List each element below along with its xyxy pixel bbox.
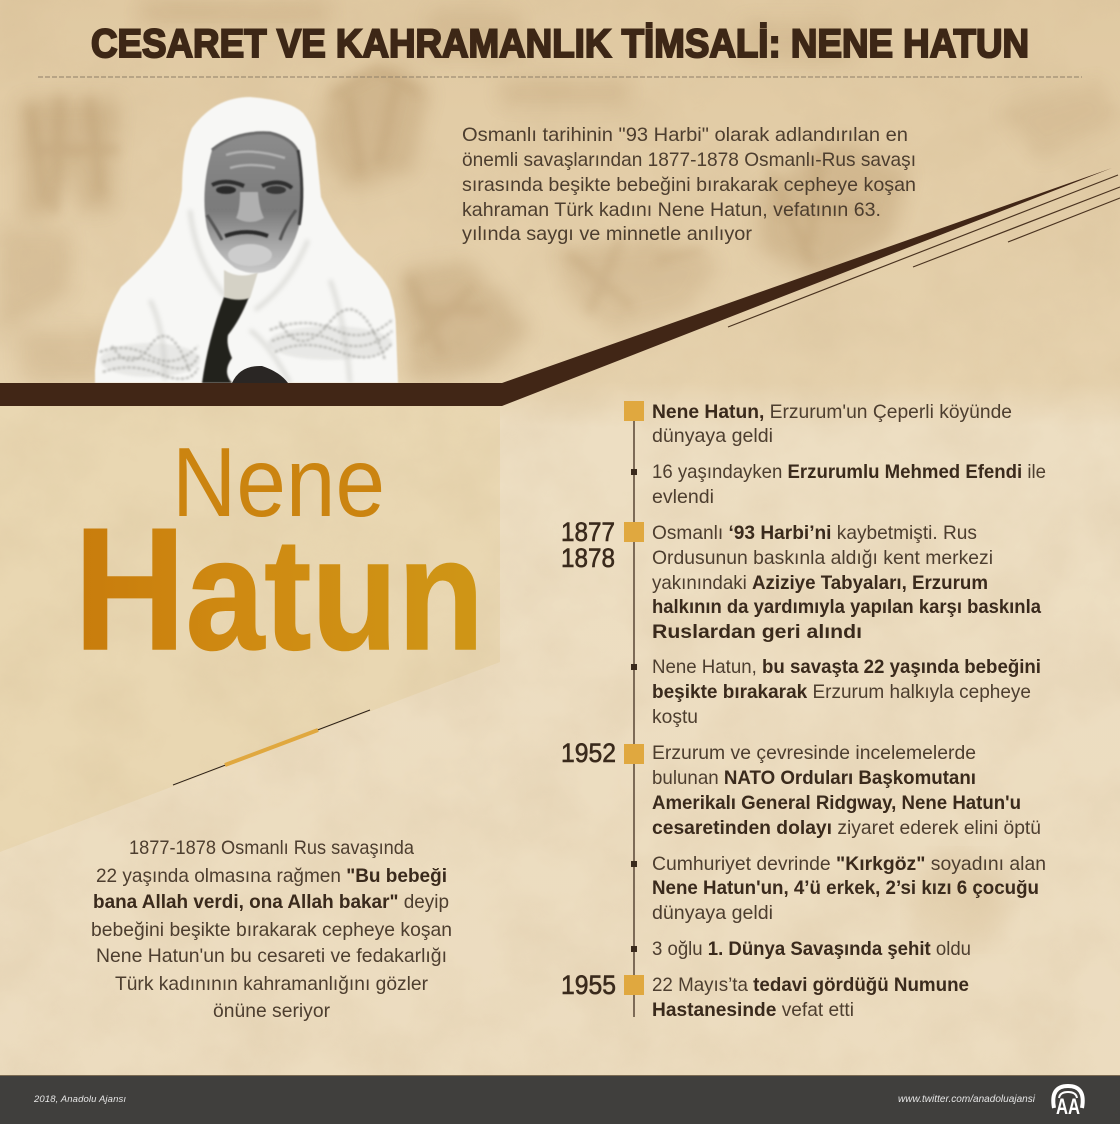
intro text: kahraman Türk kadını Nene Hatun, vefatının 63.	[462, 199, 881, 221]
dark brown divider band	[0, 168, 1112, 406]
intro text	[462, 124, 916, 245]
left story paragraph: Nene Hatun'un bu cesareti ve fedakarlığı	[96, 945, 447, 967]
name heading: Nene	[172, 427, 385, 537]
face features	[207, 133, 302, 266]
years	[561, 517, 616, 1000]
timeline text: Erzurum ve çevresinde incelemelerde	[652, 742, 976, 764]
credit: 2018, Anadolu Ajansı	[33, 1094, 126, 1105]
timeline text: yakınındaki Aziziye Tabyaları, Erzurum	[652, 572, 988, 594]
timeline text: evlendi	[652, 486, 714, 508]
timeline text: Nene Hatun'un, 4’ü erkek, 2’si kızı 6 çocuğu	[652, 877, 1039, 899]
left story paragraph: Türk kadınının kahramanlığını gözler	[115, 973, 428, 995]
left story paragraph: bana Allah verdi, ona Allah bakar" deyip	[93, 891, 449, 913]
timeline text: Amerikalı General Ridgway, Nene Hatun'u	[652, 792, 1021, 814]
years: 1877	[561, 517, 615, 547]
intro text: Osmanlı tarihinin "93 Harbi" olarak adlandırılan en	[462, 124, 908, 146]
timeline markers	[624, 401, 644, 995]
background battle sketch	[0, 0, 1120, 380]
name heading: Hatun	[74, 491, 484, 686]
left story paragraph: önüne seriyor	[213, 1000, 330, 1022]
footer bar	[0, 1075, 1120, 1124]
years: 1878	[561, 543, 615, 573]
embroidery	[100, 309, 392, 379]
thin accent lines	[728, 175, 1120, 327]
timeline text: Ordusunun baskınla aldığı kent merkezi	[652, 547, 993, 569]
timeline text: 3 oğlu 1. Dünya Savaşında şehit oldu	[652, 938, 971, 960]
left story paragraph: 1877-1878 Osmanlı Rus savaşında	[129, 837, 414, 859]
timeline text: Nene Hatun, bu savaşta 22 yaşında bebeğini	[652, 656, 1041, 678]
timeline text: 22 Mayıs’ta tedavi gördüğü Numune	[652, 974, 969, 996]
timeline text: dünyaya geldi	[652, 425, 773, 447]
portrait of Nene Hatun	[95, 97, 398, 383]
timeline text: halkının da yardımıyla yapılan karşı baskınla	[652, 596, 1041, 618]
timeline text: koştu	[652, 706, 698, 728]
timeline text: Ruslardan geri alındı	[652, 621, 862, 643]
intro text: yılında saygı ve minnetle anılıyor	[462, 223, 753, 245]
timeline	[561, 401, 1046, 1021]
years: 1955	[561, 970, 616, 1000]
left story paragraph	[91, 837, 452, 1022]
face	[204, 133, 302, 273]
intro text: sırasında beşikte bebeğini bırakarak cepheye koşan	[462, 174, 916, 196]
icon: Anadolu Agency logo: AA	[1056, 1094, 1080, 1119]
intro text: önemli savaşlarından 1877-1878 Osmanlı-Rus savaşı	[462, 149, 916, 171]
headscarf	[95, 97, 398, 383]
timeline text: beşikte bırakarak Erzurum halkıyla cepheye	[652, 681, 1031, 703]
dark dress	[202, 297, 249, 383]
left story paragraph: 22 yaşında olmasına rağmen "Bu bebeği	[96, 865, 447, 887]
timeline text: dünyaya geldi	[652, 902, 773, 924]
timeline text: Cumhuriyet devrinde "Kırkgöz" soyadını alan	[652, 853, 1046, 875]
timeline text: 16 yaşındayken Erzurumlu Mehmed Efendi ile	[652, 461, 1046, 483]
timeline text: bulunan NATO Orduları Başkomutanı	[652, 767, 976, 789]
timeline text: Osmanlı ‘93 Harbi’ni kaybetmişti. Rus	[652, 522, 977, 544]
dark shape at chest	[232, 366, 288, 383]
small ornament	[173, 710, 370, 785]
scarf shadow folds	[150, 210, 350, 383]
icon: Anadolu Agency logo	[1053, 1086, 1083, 1119]
left story paragraph: bebeğini beşikte bırakarak cepheye koşan	[91, 919, 452, 941]
timeline text: cesaretinden dolayı ziyaret ederek elini öptü	[652, 817, 1041, 839]
timeline text	[652, 401, 1046, 1021]
title: CESARET VE KAHRAMANLIK TİMSALİ: NENE HATUN	[91, 22, 1029, 66]
neck band	[224, 270, 258, 300]
timeline text: Nene Hatun, Erzurum'un Çeperli köyünde	[652, 401, 1012, 423]
timeline text: Hastanesinde vefat etti	[652, 999, 854, 1021]
darker panel behind name	[0, 406, 500, 852]
twitter url: www.twitter.com/anadoluajansi	[898, 1094, 1036, 1105]
years: 1952	[561, 738, 616, 768]
